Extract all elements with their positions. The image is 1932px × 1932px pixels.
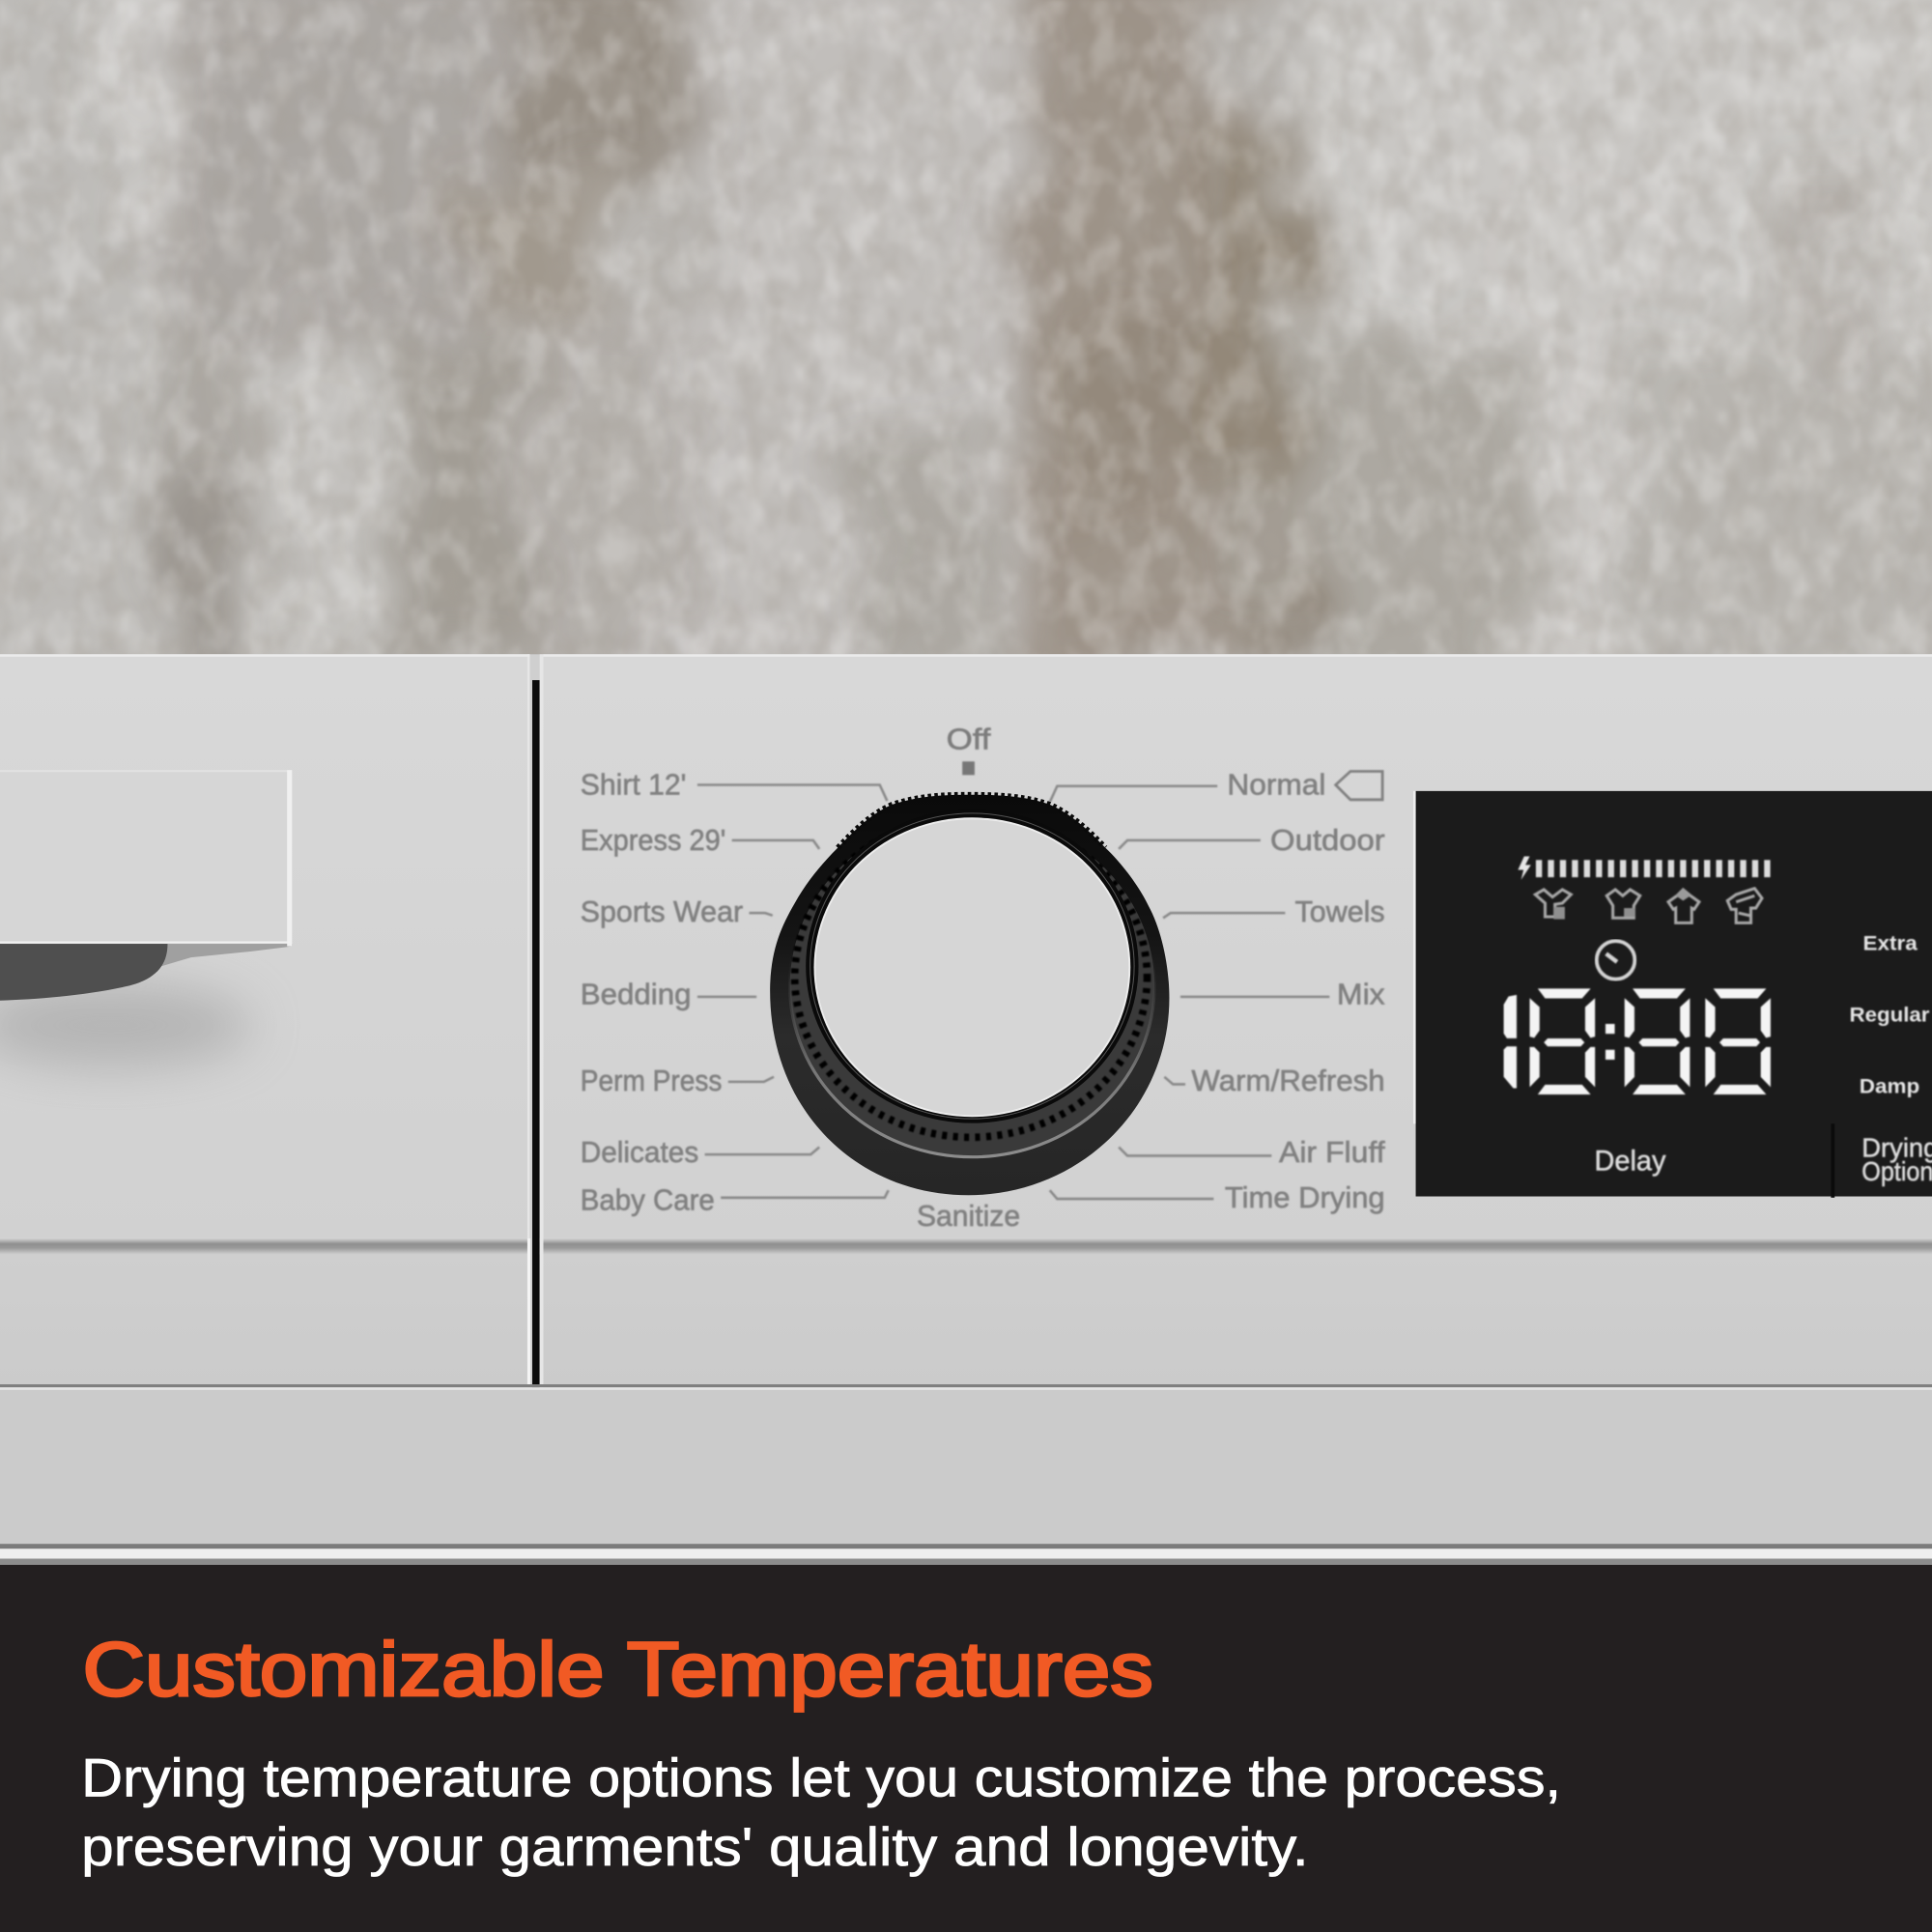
rotary dial <box>770 795 1169 1195</box>
LED display panel <box>1413 791 1932 1198</box>
button labels <box>1850 930 1930 1097</box>
background: stone wall <box>0 0 1932 690</box>
leader lines <box>697 784 1329 1199</box>
off label: Off <box>947 724 991 756</box>
right cycle labels: Time Drying <box>1225 1181 1385 1214</box>
left cycle labels <box>581 769 743 1217</box>
gap between door and control panel <box>532 680 540 1387</box>
button labels: Extra <box>1863 930 1918 954</box>
delay label: Delay <box>1595 1146 1666 1178</box>
dial labels and leader lines <box>581 724 1385 1233</box>
left cycle labels: Express 29' <box>581 824 725 857</box>
left cycle labels: Baby Care <box>581 1184 715 1217</box>
right cycle labels <box>1191 769 1385 1214</box>
door panel <box>0 654 530 1386</box>
power bar <box>1518 856 1771 880</box>
left cycle labels: Sports Wear <box>581 895 743 928</box>
right cycle labels: Warm/Refresh <box>1191 1065 1385 1097</box>
icon: drying level shirts <box>1535 889 1762 923</box>
icon: timer clock <box>1597 941 1634 980</box>
off marker <box>962 761 975 775</box>
left cycle labels: Bedding <box>581 979 692 1011</box>
left cycle labels: Shirt 12' <box>581 769 686 802</box>
right cycle labels: Outdoor <box>1270 824 1385 857</box>
control panel <box>540 654 1932 1387</box>
dial face <box>806 809 1139 1123</box>
right cycle labels: Mix <box>1337 979 1385 1011</box>
bottom strip <box>0 1384 1932 1565</box>
ridged grip <box>790 814 1154 1157</box>
left cycle labels: Perm Press <box>581 1065 722 1097</box>
serrated top edge <box>838 795 1105 848</box>
left cycle labels: Delicates <box>581 1136 698 1169</box>
caption band <box>0 1565 1932 1932</box>
door handle <box>0 770 292 1067</box>
right cycle labels: Towels <box>1295 895 1385 928</box>
right cycle labels: Air Fluff <box>1279 1136 1385 1169</box>
title: Customizable Temperatures <box>82 1626 1153 1712</box>
appliance body <box>0 654 1932 1566</box>
icon: normal tag <box>1336 771 1382 800</box>
drying options label <box>1861 1133 1932 1186</box>
body text: preserving your garments' quality and longevity. <box>81 1817 1309 1877</box>
right cycle labels: Normal <box>1227 769 1325 802</box>
seven segment readout <box>1504 988 1771 1094</box>
sanitize label: Sanitize <box>917 1200 1020 1233</box>
button labels: Regular <box>1850 1002 1930 1026</box>
body text: Drying temperature options let you customize the process, <box>81 1748 1561 1808</box>
button labels: Damp <box>1860 1073 1919 1097</box>
body text <box>81 1748 1561 1877</box>
